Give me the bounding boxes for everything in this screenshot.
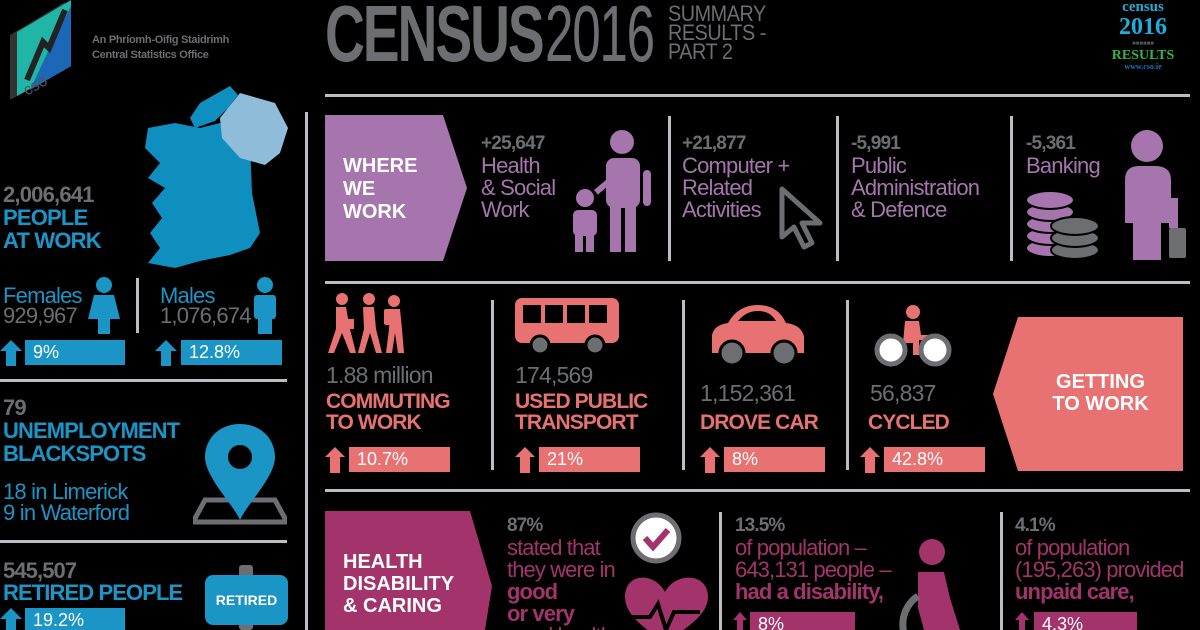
- stat: health & social work: Work: [481, 197, 529, 222]
- title: [325, 0, 654, 78]
- text: TO WORK: [326, 411, 421, 434]
- panel: getting to work: TO WORK: [1052, 393, 1149, 415]
- bar: commuting 10.7%: 10.7%: [357, 449, 408, 469]
- stat: people at work: [3, 182, 102, 253]
- panel: where we work: WORK: [343, 201, 406, 223]
- stat: good health: good: [507, 579, 557, 604]
- text: 18 in Limerick: [3, 479, 128, 504]
- icon: retired sign: [205, 565, 288, 630]
- stat: computer: Computer +: [682, 153, 790, 178]
- stat: disability: of population –: [735, 535, 866, 560]
- stat: unpaid care: 4.1%: [1015, 515, 1055, 536]
- subtitle: SUMMARY: [668, 1, 766, 26]
- stat: unpaid care: (195,263) provided: [1015, 557, 1183, 582]
- stat: unpaid care: unpaid care,: [1015, 579, 1134, 604]
- stat: unpaid care: [1015, 513, 1183, 603]
- stat: good health: 87%: [507, 515, 542, 536]
- stat: health & social work: & Social: [481, 175, 555, 200]
- stat: good health: stated that: [507, 535, 600, 560]
- icon: coins: [1027, 192, 1098, 258]
- bar: retired 19.2%: [0, 608, 125, 630]
- org name: [92, 34, 229, 61]
- logo: census 2016 results: www.cso.ie: [1124, 62, 1162, 71]
- stat: commuting: 1.88 million: [326, 362, 433, 388]
- stat: good health: or very: [507, 601, 574, 626]
- stat: disability: 13.5%: [735, 515, 784, 536]
- bar: disability 8%: [733, 612, 857, 630]
- logo: CSO: cso: [20, 72, 51, 99]
- stat: computer: +21,877: [682, 133, 746, 154]
- stat: computer: Related: [682, 175, 752, 200]
- stat: banking: -5,361: [1026, 133, 1075, 154]
- stat: cycled: 56,837: [870, 380, 936, 406]
- icon: female: [88, 277, 120, 334]
- subtitle: [668, 1, 766, 64]
- map: Ireland: [145, 86, 288, 268]
- stat: drove car: 1,152,361: [700, 380, 795, 406]
- stat: unemployment blackspots: BLACKSPOTS: [3, 441, 146, 466]
- stat: unemployment blackspots: 79: [3, 395, 26, 420]
- stat: people at work: 2,006,641: [3, 182, 94, 207]
- bar: cycled 42.8%: [860, 447, 985, 473]
- stat: females: 929,967: [3, 303, 77, 328]
- bar: males 12.8%: [155, 340, 282, 366]
- stat: females: [3, 283, 82, 328]
- text: DROVE CAR: [700, 411, 818, 434]
- text: TRANSPORT: [515, 411, 638, 434]
- logo: census 2016 results: RESULTS: [1112, 48, 1174, 63]
- stat: health & social work: +25,647: [481, 133, 545, 154]
- stat: public administration: Public: [851, 153, 906, 178]
- icon: parent and child: [573, 130, 651, 252]
- org name: Central Statistics Office: [92, 49, 209, 61]
- stat: good health: they were in: [507, 557, 615, 582]
- stat: good health: [507, 515, 615, 630]
- bar: females 9%: [0, 340, 125, 366]
- panel: health disability & caring: & CARING: [343, 595, 442, 617]
- stat: males: 1,076,674: [160, 303, 251, 328]
- stat: computer: Activities: [682, 197, 761, 222]
- stat: public administration: [851, 133, 979, 222]
- stat: public administration: & Defence: [851, 197, 947, 222]
- subtitle: RESULTS -: [668, 20, 766, 45]
- stat: retired people: [3, 558, 182, 605]
- text: 9 in Waterford: [3, 500, 129, 525]
- panel: where we work: WHERE: [343, 155, 417, 177]
- panel: health disability & caring: HEALTH: [343, 551, 423, 573]
- panel: getting to work: [993, 317, 1183, 471]
- icon: cyclist: [874, 305, 952, 366]
- logo: CSO: [10, 0, 71, 100]
- stat: unemployment blackspots: [3, 395, 180, 466]
- stat: people at work: AT WORK: [3, 228, 101, 253]
- stat: unemployment blackspots: UNEMPLOYMENT: [3, 418, 179, 443]
- icon: car: [712, 305, 804, 364]
- stat: public administration: -5,991: [851, 133, 900, 154]
- bar: males 12.8%: 12.8%: [189, 342, 240, 362]
- panel: where we work: WE: [343, 178, 375, 200]
- logo: census 2016 results: [1112, 0, 1174, 71]
- text: COMMUTING: [326, 390, 450, 413]
- icon: businessman: [1125, 130, 1186, 260]
- stat: females: Females: [3, 283, 82, 308]
- text: CYCLED: [868, 411, 949, 434]
- stat: banking: [1026, 133, 1100, 178]
- bar: care 4.3%: [1015, 612, 1139, 630]
- icon: male: [254, 277, 276, 334]
- icon: retired sign: RETIRED: [216, 592, 277, 608]
- stat: computer: [682, 133, 790, 222]
- stat: disability: 643,131 people –: [735, 557, 891, 582]
- stat: public administration: Administration: [851, 175, 979, 200]
- logo: census 2016 results: ■■■■■■: [1132, 41, 1154, 47]
- bar: transport 21%: 21%: [547, 449, 583, 469]
- icon: wheelchair: [888, 538, 963, 630]
- stat: males: Males: [160, 283, 215, 308]
- stat: disability: [735, 515, 892, 604]
- bar: cycled 42.8%: 42.8%: [892, 449, 943, 469]
- bar: retired 19.2%: 19.2%: [33, 610, 84, 630]
- text: USED PUBLIC: [515, 390, 647, 413]
- stat: public transport: 174,569: [515, 362, 593, 388]
- bar: transport 21%: [515, 447, 640, 473]
- stat: males: [160, 283, 251, 328]
- logo: census 2016 results: 2016: [1119, 14, 1167, 40]
- panel: health disability & caring: [325, 511, 492, 630]
- bar: females 9%: 9%: [33, 342, 59, 362]
- bar: commuting 10.7%: [325, 447, 450, 473]
- panel: getting to work: GETTING: [1056, 371, 1145, 393]
- panel: health disability & caring: DISABILITY: [343, 573, 454, 595]
- stat: people at work: PEOPLE: [3, 205, 87, 230]
- bar: car 8%: 8%: [732, 449, 758, 469]
- stat: retired people: RETIRED PEOPLE: [3, 580, 182, 605]
- icon: bus: [515, 298, 619, 352]
- stat: health & social work: Health: [481, 153, 540, 178]
- stat: disability: had a disability,: [735, 579, 883, 604]
- stat: banking: Banking: [1026, 153, 1100, 178]
- icon: commuters: [328, 293, 404, 353]
- icon: map pin: [193, 424, 287, 524]
- stat: health & social work: [481, 133, 555, 222]
- subtitle: PART 2: [668, 39, 732, 64]
- icon: check and heart: [625, 512, 708, 630]
- icon: cursor: [780, 186, 822, 250]
- stat: retired people: 545,507: [3, 558, 76, 583]
- bar: car 8%: [700, 447, 825, 473]
- panel: where we work: [325, 115, 467, 261]
- org name: An Phríomh-Oifig Staidrimh: [92, 34, 229, 46]
- stat: unpaid care: of population: [1015, 535, 1129, 560]
